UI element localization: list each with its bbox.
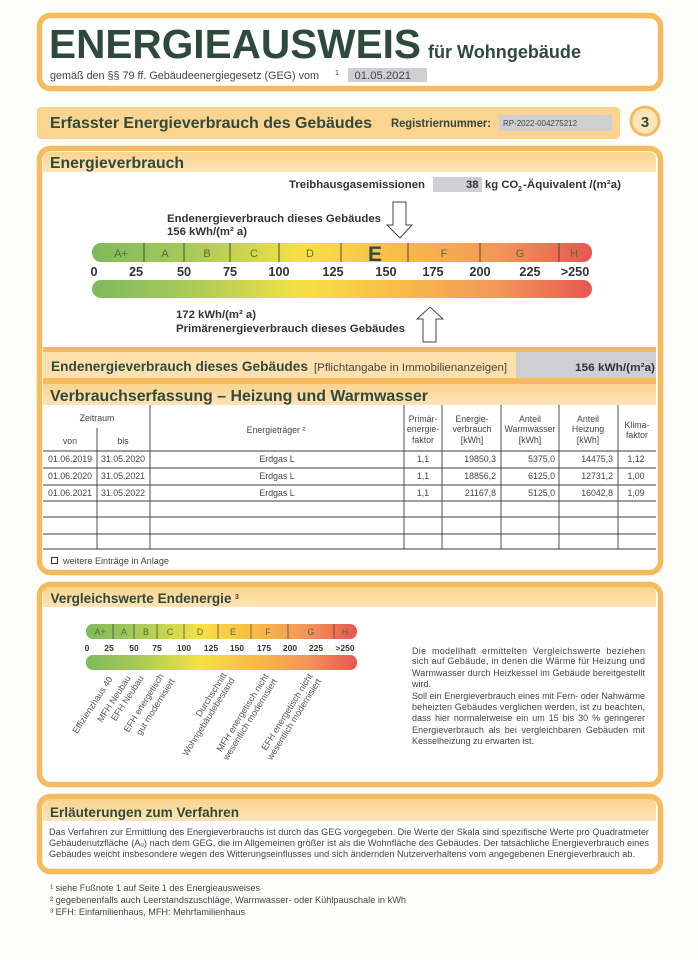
table row 2021-2022: Erdgas L — [259, 488, 295, 498]
table header: von — [63, 436, 77, 446]
panel: procedure notes — [40, 796, 660, 872]
table row 2021-2022: 5125,0 — [528, 488, 555, 498]
band: Energieverbrauch — [43, 152, 656, 172]
greenhouse gas emissions line: Treibhausgasemissionen — [289, 179, 425, 191]
registration number field: RP-2022-004275212 — [503, 119, 578, 128]
explanatory text on comparison values: sich auf Gebäude, in denen die Wärme für Heizung und — [412, 656, 645, 666]
table row 2019-2020: 1,1 — [417, 454, 429, 464]
band: Verbrauchserfassung: Verbrauchserfassung – Heizung und Warmwasser — [50, 388, 428, 405]
explanatory text on comparison values: Warmwasser durch Heizkessel im Gebäude bereitgestellt — [412, 668, 645, 678]
table header: Energieträger ² — [247, 425, 305, 435]
table row 2020-2021: 6125,0 — [528, 471, 555, 481]
procedure text — [49, 827, 649, 859]
explanatory text on comparison values: wird. — [411, 679, 431, 689]
divider — [43, 347, 656, 352]
primary energy label — [176, 309, 405, 335]
scale numbers: 75 — [223, 265, 237, 279]
greenhouse gas emissions line — [289, 177, 621, 193]
comparison class bar: F — [265, 627, 271, 637]
table row 2021-2022: 16042,8 — [581, 488, 613, 498]
comparison scale numbers — [85, 643, 355, 653]
panel: title header — [40, 16, 660, 88]
band: mandatory final energy figure: Endenergieverbrauch dieses Gebäudes — [51, 359, 308, 374]
table row 2019-2020: 1,12 — [627, 454, 645, 464]
greenhouse gas emissions line: 2 — [518, 186, 522, 193]
comparison scale numbers: 25 — [104, 643, 114, 653]
rotated building type labels: MFH Neubau — [95, 674, 133, 724]
registration label: Registriernummer: — [391, 117, 491, 130]
greenhouse gas emissions line: -Äquivalent /(m²a) — [523, 178, 621, 191]
table row 2021-2022: 31.05.2022 — [101, 488, 145, 498]
rotated building type labels: EFH Neubau — [109, 674, 146, 723]
energy class bar: B — [203, 248, 211, 260]
greenhouse gas emissions line: 38 — [466, 179, 479, 191]
table row 2021-2022: 1,1 — [417, 488, 429, 498]
final energy label: 156 kWh/(m² a) — [167, 226, 247, 238]
table header: Primär- — [409, 414, 437, 424]
checkbox: further entries: weitere Einträge in Anlage — [62, 556, 169, 566]
table row 2020-2021: 1,1 — [417, 471, 429, 481]
energy class bar: C — [250, 248, 258, 260]
scale numbers: >250 — [561, 265, 589, 279]
rotated building type labels: wesentlich modernisiert — [220, 676, 279, 763]
energy class bar: F — [441, 248, 448, 260]
table row 2021-2022: 21167,8 — [465, 488, 496, 498]
divider — [43, 378, 656, 384]
energy class bar: E — [368, 243, 382, 266]
table row 2019-2020 — [48, 454, 645, 464]
comparison class bar: B — [143, 627, 149, 637]
table header: faktor — [626, 430, 648, 440]
table header: verbrauch — [452, 424, 492, 434]
page number badge: 3 — [641, 114, 649, 131]
comparison scale numbers: 0 — [85, 643, 90, 653]
title: Energieausweis: ENERGIEAUSWEIS — [49, 21, 421, 67]
table row 2021-2022: 1,09 — [627, 488, 645, 498]
table header: Zeitraum — [80, 413, 114, 423]
date field — [348, 68, 427, 82]
scale numbers: 150 — [375, 265, 397, 279]
scale numbers: 100 — [268, 265, 290, 279]
rotated building type labels: EFH energetisch nicht — [259, 671, 315, 752]
band: Verbrauchserfassung — [43, 384, 656, 405]
table row 2019-2020: 01.06.2019 — [48, 454, 92, 464]
table row 2020-2021: 01.06.2020 — [48, 471, 92, 481]
explanatory text on comparison values: Energieverbrauch als bei vergleichbaren Gebäuden mit — [412, 725, 645, 735]
rotated building type labels: MFH energetisch nicht — [214, 671, 271, 753]
comparison class bar: A+ — [94, 627, 106, 637]
table header: Klima- — [625, 420, 650, 430]
date field: 01.05.2021 — [354, 70, 411, 82]
comparison scale numbers: 175 — [257, 643, 271, 653]
band: mandatory final energy figure: 156 kWh/(m²a) — [575, 362, 655, 374]
table row 2021-2022: 01.06.2021 — [48, 488, 92, 498]
band: Energieverbrauch: Energieverbrauch — [50, 155, 184, 172]
band: mandatory final energy figure — [43, 352, 656, 378]
final energy label — [167, 213, 381, 238]
explanatory text on comparison values: Kesselheizung zu erwarten ist. — [412, 736, 534, 746]
footnotes: ¹ siehe Fußnote 1 auf Seite 1 des Energieausweises — [50, 883, 260, 893]
table header: Anteil — [519, 414, 541, 424]
procedure text: Das Verfahren zur Ermittlung des Energieverbrauchs ist durch das GEG vorgegeben. Die Werte der Skala sind spezifische Werte pro Quadratmeter — [49, 827, 649, 837]
table row 2020-2021: Erdgas L — [259, 471, 295, 481]
comparison class bar: H — [342, 627, 348, 637]
comparison scale numbers: 200 — [283, 643, 297, 653]
greenhouse gas emissions line: kg CO — [485, 179, 518, 191]
explanatory text on comparison values: beheizten Gebäudes verglichen werden, ist zu beachten, — [412, 702, 645, 712]
consumption table — [43, 405, 656, 549]
scale numbers: 0 — [90, 265, 98, 279]
table row 2020-2021 — [48, 471, 645, 481]
table header: energie- — [407, 424, 439, 434]
footnotes: ³ EFH: Einfamilienhaus, MFH: Mehrfamilienhaus — [50, 907, 245, 917]
comparison class bar: C — [167, 627, 174, 637]
band: Vergleichswerte: 3 — [235, 594, 239, 601]
procedure text: Gebäudes weicht insbesondere wegen des Witterungseinflusses und sich ändernden Nutzerverhaltens vom angegebenen Energieverbrauch ab. — [49, 849, 635, 859]
band: Vergleichswerte: Vergleichswerte Endenergie — [50, 591, 232, 606]
table row 2019-2020: 19850,3 — [464, 454, 496, 464]
rotated building type labels: Durchschnitt — [194, 670, 229, 718]
energy class bar: D — [306, 248, 314, 260]
subtitle: für Wohngebäude: für Wohngebäude — [428, 42, 581, 62]
table header: bis — [117, 436, 129, 446]
comparison scale numbers: 150 — [230, 643, 244, 653]
scale numbers: 175 — [422, 265, 444, 279]
table header: Warmwasser — [504, 424, 556, 434]
table header: Energie- — [455, 414, 489, 424]
table header: faktor — [412, 435, 434, 445]
rotated building type labels: Wohngebäudebestand — [180, 676, 237, 758]
page number badge — [631, 107, 659, 135]
comparison class bar: A — [121, 627, 127, 637]
scale numbers: 25 — [129, 265, 143, 279]
comparison scale numbers: 50 — [129, 643, 139, 653]
table row 2021-2022 — [48, 488, 645, 498]
primary energy label: 172 kWh/(m² a) — [176, 309, 256, 321]
comparison class bar: D — [197, 627, 204, 637]
comparison scale numbers: 100 — [177, 643, 191, 653]
energy class bar: A — [161, 248, 169, 260]
footnote marker 1: 1 — [335, 70, 339, 77]
comparison scale numbers: 225 — [309, 643, 323, 653]
scale numbers — [90, 265, 589, 279]
rotated building type labels: EFH energetisch — [122, 672, 166, 734]
section bar: recorded energy consumption — [37, 107, 620, 139]
rotated building type labels: Effizienzhaus 40 — [70, 675, 115, 735]
panel: energy consumption and recording — [40, 148, 660, 572]
table row 2019-2020: Erdgas L — [259, 454, 295, 464]
table row 2019-2020: 14475,3 — [581, 454, 613, 464]
comparison gradient bar — [86, 655, 357, 670]
explanatory text on comparison values — [411, 646, 645, 746]
table row 2020-2021: 12731,2 — [581, 471, 613, 481]
energy class bar — [92, 243, 592, 266]
scale numbers: 225 — [519, 265, 541, 279]
explanatory text on comparison values: Soll ein Energieverbrauch eines mit Fern- oder Nahwärme — [412, 691, 645, 701]
table header: [kWh] — [577, 435, 599, 445]
procedure text: Gebäudenutzfläche (Aᵤ) nach dem GEG, die im Allgemeinen größer ist als die Wohnfläche des Gebäudes. Der tatsächliche Energieverbrauch eines — [49, 838, 649, 848]
footnotes — [50, 883, 406, 917]
explanatory text on comparison values: dass hier normalerweise ein um 15 bis 30 % geringerer — [412, 713, 645, 723]
band: Vergleichswerte — [43, 587, 656, 607]
scale numbers: 200 — [469, 265, 491, 279]
rotated building type labels: wesentlich modernisiert — [264, 676, 323, 763]
table row 2019-2020: 31.05.2020 — [101, 454, 145, 464]
gradient scale bar — [92, 280, 592, 298]
section heading: Erfasster Energieverbrauch des Gebäudes — [50, 115, 372, 132]
final energy label: Endenergieverbrauch dieses Gebäudes — [167, 213, 381, 225]
arrow: final energy marker — [387, 202, 412, 238]
primary energy label: Primärenergieverbrauch dieses Gebäudes — [176, 323, 405, 335]
scale numbers: 125 — [322, 265, 344, 279]
table header: [kWh] — [519, 435, 541, 445]
explanatory text on comparison values: Die modellhaft ermittelten Vergleichswerte beziehen — [412, 646, 645, 656]
comparison scale numbers: 75 — [152, 643, 162, 653]
comparison scale numbers: >250 — [335, 643, 355, 653]
registration number field — [499, 115, 612, 131]
table header — [63, 413, 650, 446]
table row 2019-2020: 5375,0 — [528, 454, 555, 464]
arrow: primary energy marker — [417, 307, 443, 342]
band: Erläuterungen: Erläuterungen zum Verfahren — [50, 805, 239, 820]
table row 2020-2021: 18856,2 — [464, 471, 496, 481]
legal reference line: gemäß den §§ 79 ff. Gebäudeenergiegesetz (GEG) vom — [50, 70, 319, 82]
band: mandatory final energy figure: [Pflichtangabe in Immobilienanzeigen] — [314, 362, 507, 374]
comparison class bar: E — [230, 627, 236, 637]
energy class bar: H — [570, 248, 578, 260]
table row 2020-2021: 1,00 — [627, 471, 645, 481]
band: Erläuterungen — [43, 799, 656, 821]
comparison class bar — [86, 624, 357, 639]
energy class bar: A+ — [114, 248, 128, 260]
table header: [kWh] — [461, 435, 483, 445]
comparison class bar: G — [307, 627, 315, 637]
rotated building type labels — [70, 670, 323, 763]
scale numbers: 50 — [177, 265, 191, 279]
energy class bar: G — [516, 248, 524, 260]
footnotes: ² gegebenenfalls auch Leerstandszuschläge, Warmwasser- oder Kühlpauschale in kWh — [50, 895, 406, 905]
panel: comparison values — [40, 584, 660, 784]
table header: Anteil — [577, 414, 599, 424]
table row 2020-2021: 31.05.2021 — [101, 471, 145, 481]
rotated building type labels: gut modernisiert — [134, 676, 177, 737]
table header: Heizung — [572, 424, 604, 434]
comparison scale numbers: 125 — [204, 643, 218, 653]
